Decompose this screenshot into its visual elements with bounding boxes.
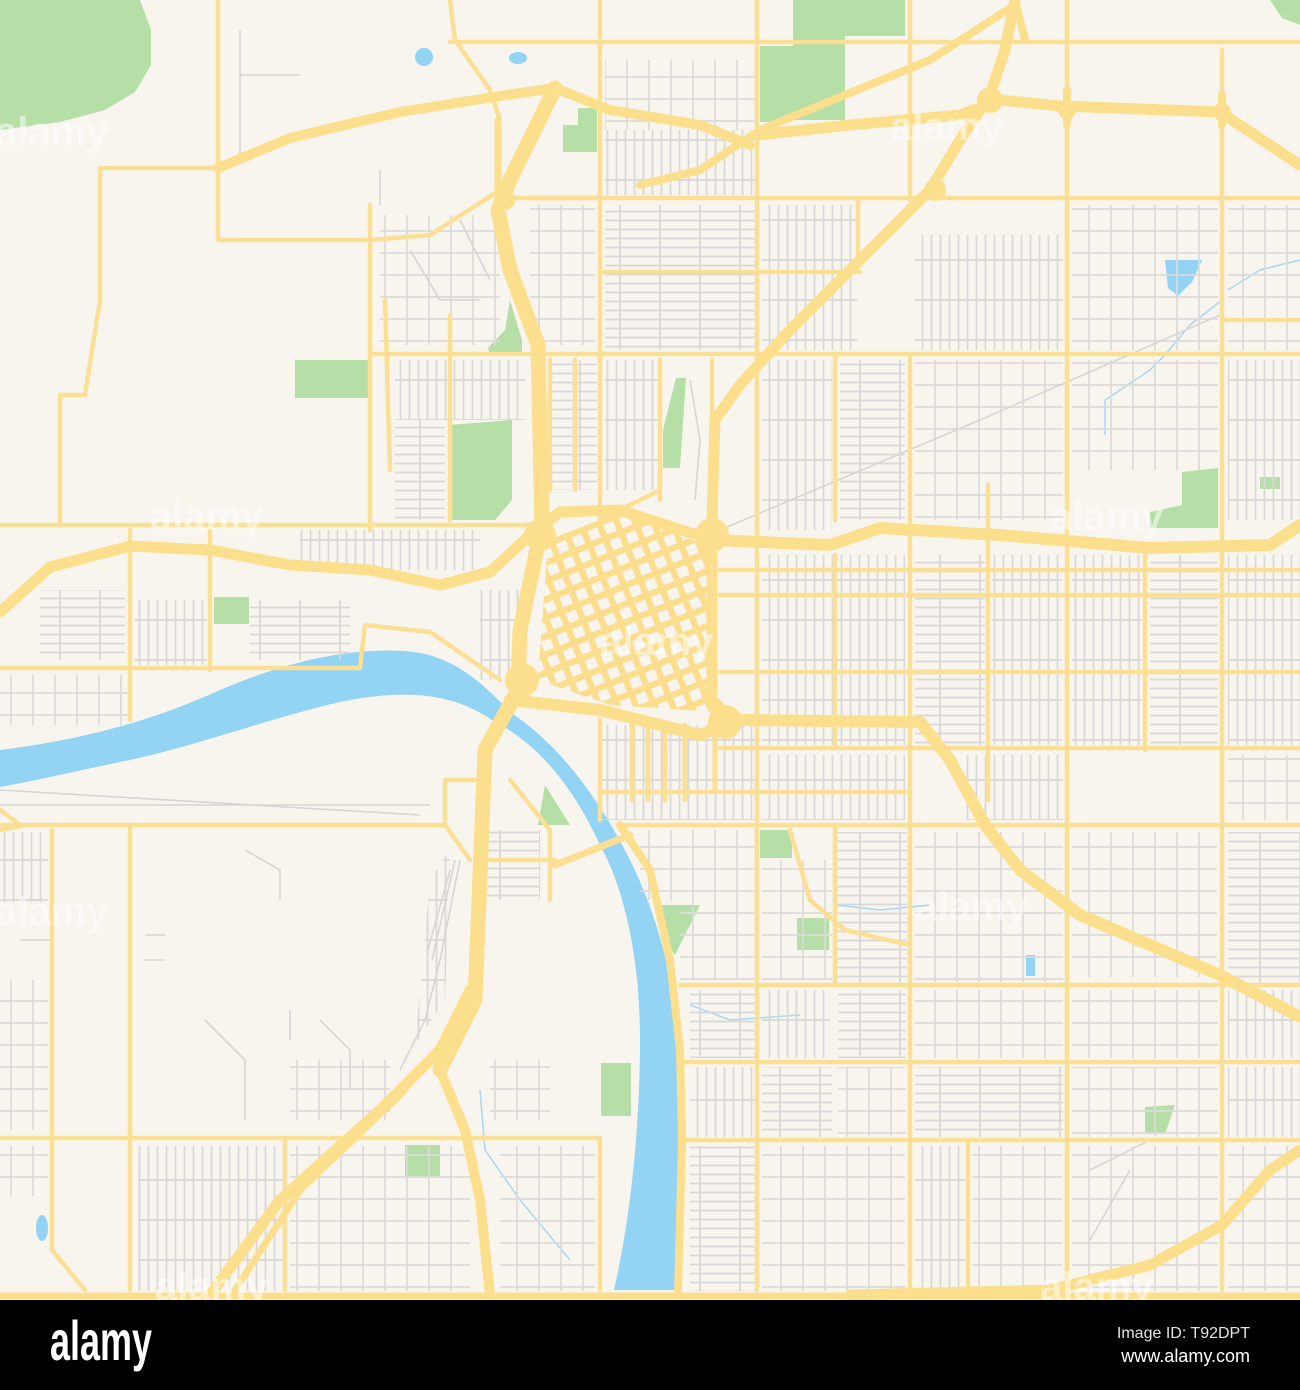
footer bar	[0, 1300, 1300, 1390]
footer logo: alamy	[50, 1309, 152, 1372]
highway interchanges	[495, 87, 1231, 739]
downtown street grid	[538, 512, 715, 712]
watermarks	[0, 105, 1164, 1309]
river	[0, 651, 684, 1290]
watermarks: alamy	[150, 495, 264, 539]
watermarks: alamy	[915, 885, 1029, 929]
watermarks: alamy	[1040, 1265, 1154, 1309]
watermarks: alamy	[890, 105, 1004, 149]
website: www.alamy.com	[1120, 1346, 1250, 1366]
streams	[480, 260, 1300, 1260]
watermarks: alamy	[155, 1265, 269, 1309]
river island	[520, 750, 550, 778]
watermarks: alamy	[1050, 495, 1164, 539]
lakes	[36, 48, 1202, 1241]
image id: Image ID: T92DPT	[1117, 1325, 1250, 1342]
watermarks: alamy	[600, 620, 714, 664]
